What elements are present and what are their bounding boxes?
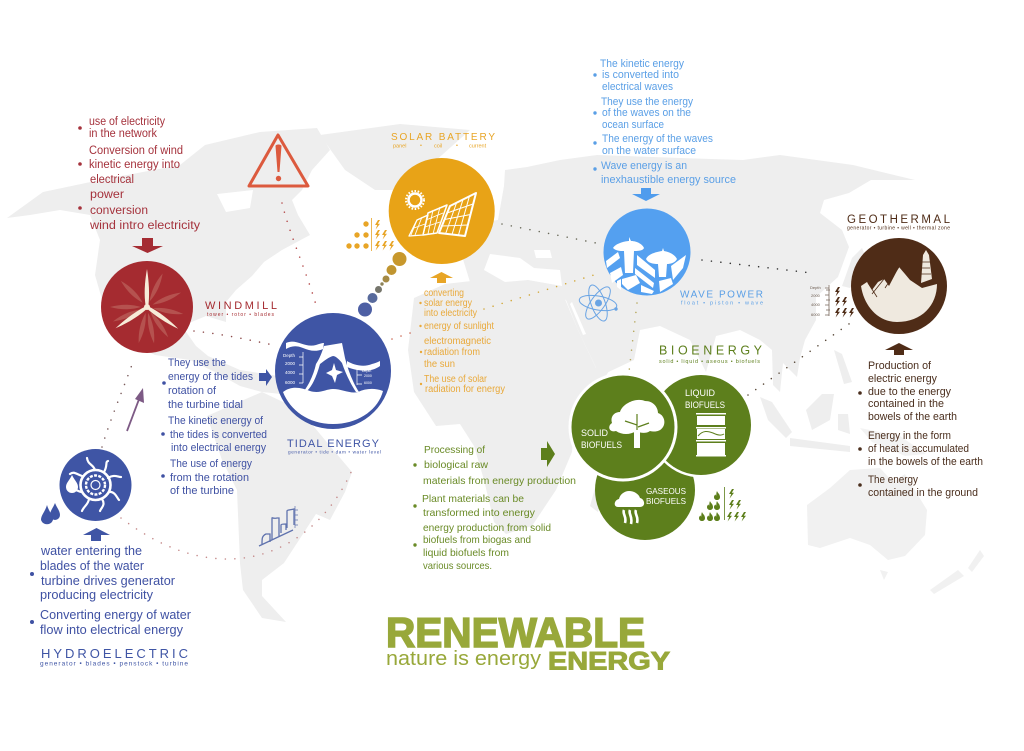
heading: bioenergy: BIOENERGY [659, 344, 763, 358]
text: wave bullets [593, 58, 736, 186]
text: wave bullets: electrical waves [602, 81, 673, 93]
text: tidal bullets: from the rotation [170, 472, 249, 484]
text: hydro bullets: producing electricity [40, 588, 154, 602]
icon: gaseous biofuels circle [595, 440, 695, 540]
map: Iberia and Britain [446, 226, 470, 258]
text: bio bullets [413, 444, 576, 572]
icon: tidal circle: 2000 [364, 374, 372, 378]
text: solar bullets: The use of solar [424, 374, 488, 385]
text: windmill bullets: use of electricity [89, 116, 165, 128]
text: geothermal bullets: due to the energy [868, 386, 951, 398]
text: wave bullets: The kinetic energy [600, 58, 684, 70]
text: solar bullets [419, 288, 505, 395]
text: windmill bullets: in the network [89, 128, 157, 140]
heading: wave power: WAVE POWER [680, 290, 763, 300]
heading: hydroelectric: HYDROELECTRIC [41, 646, 188, 661]
map: Tasmania and New Zealand [880, 550, 984, 594]
icon: windmill circle [101, 261, 193, 353]
text: bio bullets: Plant materials can be [422, 493, 524, 505]
map: New Guinea [860, 428, 926, 456]
heading: hydroelectric: generator • blades • penstock • turbine [40, 660, 188, 668]
dotted connector: solar to wave [502, 224, 596, 243]
text: solar bullets: into electricity [424, 308, 477, 319]
panel: windmill [78, 116, 277, 353]
arrow: tidal right [259, 369, 272, 386]
map: Eurasia [462, 155, 915, 392]
icon: water drops [41, 503, 60, 524]
heading: solar battery: • [420, 143, 422, 149]
heading: windmill: WINDMILL [205, 300, 277, 312]
text: tidal bullets: the tides is converted [170, 429, 267, 441]
text: windmill bullets [78, 116, 200, 232]
title: renewable energy: RENEWABLE [386, 609, 645, 656]
text: geothermal bullets: electric energy [868, 373, 937, 385]
panel: bioenergy [413, 344, 763, 572]
dotted connector: bioenergy to geothermal [748, 319, 856, 395]
text: wave bullets: Wave energy is an [601, 160, 687, 172]
dotted connector: solar text to wave [484, 274, 597, 309]
text: hydro bullets: blades of the water [40, 559, 144, 573]
dotted connector: tidal to solar text [392, 332, 413, 339]
icon: tidal circle [275, 313, 391, 429]
icon: tidal circle: 6000 [364, 381, 372, 385]
text: tidal bullets: They use the [168, 357, 226, 369]
dotted connector: hydro to windmill [102, 362, 133, 447]
text: tidal bullets: rotation of [168, 385, 217, 397]
heading: solar battery: panel [393, 144, 406, 150]
heading: windmill: tower • rotor • blades [207, 312, 274, 318]
text: windmill bullets: Conversion of wind [89, 145, 183, 157]
map: Sumatra [760, 397, 792, 438]
text: bio bullets: materials from energy production [423, 475, 576, 487]
icon: bar chart [259, 506, 298, 546]
arrow: geothermal up [885, 343, 913, 355]
text: bio bullets: biofuels from biogas and [423, 534, 531, 546]
arrow: wave down [632, 188, 660, 201]
dotted connector: windmill to tidal [194, 331, 278, 346]
heading: geothermal: GEOTHERMAL [847, 214, 951, 226]
heading: tidal energy: generator • tide • dam • water level [288, 450, 381, 454]
icon: solar circle [389, 158, 495, 264]
text: bio bullets: energy production from solid [423, 522, 551, 534]
heading: tidal energy: TIDAL ENERGY [287, 438, 380, 450]
icon: depth gauge with bolts: 6000 [811, 312, 821, 317]
text: bio bullets: Processing of [424, 444, 485, 456]
map: Greenland [320, 124, 470, 190]
dotted connector: wave to bioenergy [629, 303, 637, 372]
heading: bioenergy: solid • liquid • aseous • biofuels [659, 359, 760, 365]
icon: solid biofuels circle [568, 372, 678, 482]
heading: wave power [680, 290, 763, 306]
icon: depth gauge with bolts: 4000 [811, 302, 821, 307]
text: wave bullets: of the waves on the [602, 107, 691, 119]
text: hydro bullets: flow into electrical energy [40, 623, 184, 637]
title: renewable energy [386, 609, 670, 676]
heading: hydroelectric [40, 646, 188, 668]
text: solar bullets: the sun [424, 359, 455, 370]
text: windmill bullets: power [90, 189, 124, 201]
text: bio bullets: biological raw [424, 459, 488, 471]
text: tidal bullets: The kinetic energy of [168, 415, 264, 427]
text: wave bullets: The energy of the waves [602, 133, 713, 145]
text: geothermal bullets: The energy [868, 474, 918, 486]
text: bio bullets: liquid biofuels from [423, 547, 509, 559]
text: wave bullets: ocean surface [602, 119, 664, 131]
text: tidal bullets: of the turbine [170, 485, 234, 497]
icon: depth gauge with bolts [810, 285, 854, 318]
text: geothermal bullets: contained in the [868, 398, 944, 410]
text: wave bullets: is converted into [602, 69, 679, 81]
dotted connector: warning to tidal [282, 203, 316, 305]
text: windmill bullets: kinetic energy into [89, 159, 180, 171]
text: geothermal bullets: of heat is accumulated [868, 443, 969, 455]
text: windmill bullets: conversion [90, 205, 148, 217]
icon: tidal circle: 4000 [285, 370, 296, 375]
icon: tidal circle: Depth [283, 353, 296, 358]
text: bio bullets: various sources. [423, 560, 492, 572]
heading: geothermal: generator • turbine • well • thermal zone [847, 226, 950, 232]
text: geothermal bullets: bowels of the earth [868, 411, 957, 423]
text: hydro bullets [30, 544, 191, 637]
arrow: solar up [430, 272, 453, 283]
text: tidal bullets [161, 357, 267, 497]
text: hydro bullets: water entering the [40, 544, 142, 558]
map: Africa [408, 280, 612, 534]
text: solar bullets: solar energy [424, 298, 472, 309]
text: wave bullets: They use the energy [601, 96, 693, 108]
text: wave bullets: on the water surface [602, 145, 696, 157]
icon: tidal circle: Depth [362, 369, 371, 373]
panel: geothermal [810, 214, 983, 499]
heading: solar battery: • [456, 143, 458, 149]
map: Australia [807, 468, 927, 560]
text: windmill bullets: wind intro electricity [89, 220, 200, 232]
map: South America [207, 392, 352, 622]
text: wave bullets: inexhaustible energy source [601, 174, 736, 186]
icon: gaseous biofuels circle: BIOFUELS [646, 496, 686, 506]
map: inland seas cut-outs [217, 190, 586, 335]
panel: hydroelectric [30, 449, 191, 668]
text: bio bullets: transformed into energy [423, 507, 536, 519]
text: solar bullets: radiation for energy [425, 384, 505, 395]
icon: bio legend flames and bolts [699, 487, 746, 522]
text: tidal bullets: into electrical energy [171, 442, 266, 454]
icon: solid biofuels circle: SOLID [581, 428, 608, 439]
text: solar bullets: radiation from [424, 347, 480, 358]
icon: gaseous biofuels circle: GASEOUS [646, 486, 686, 496]
panel: tidal energy [161, 313, 391, 497]
arrow: bio right [541, 441, 555, 467]
icon: liquid biofuels circle: BIOFUELS [685, 400, 725, 411]
arrow: hydro up [83, 528, 110, 541]
text: geothermal bullets: in the bowels of the earth [868, 456, 983, 468]
title: renewable energy: ENERGY [548, 648, 670, 676]
heading: solar battery: coil [434, 144, 442, 150]
icon: depth gauge with bolts: 2000 [811, 293, 821, 298]
text: tidal bullets: energy of the tides [168, 371, 253, 383]
text: tidal bullets: The use of energy [170, 458, 252, 470]
icon: wave circle [604, 208, 690, 296]
text: geothermal bullets: contained in the ground [868, 487, 978, 499]
text: solar bullets: converting [424, 288, 464, 299]
text: solar bullets: electromagnetic [424, 336, 491, 347]
world map background [7, 124, 984, 622]
icon: connecting bubbles [358, 252, 406, 316]
dotted connector: hydro to tidal arc [121, 470, 352, 559]
text: solar bullets: energy of sunlight [424, 321, 494, 332]
heading: solar battery [391, 132, 495, 150]
text: hydro bullets: Converting energy of water [40, 608, 191, 622]
panel: solar battery [346, 132, 505, 395]
map: Borneo [806, 394, 834, 430]
icon: depth gauge with bolts: Depth [810, 285, 821, 290]
heading: solar battery: current [469, 144, 487, 150]
icon: liquid biofuels circle: LIQUID [685, 388, 715, 399]
panel: wave power [578, 58, 763, 323]
text: geothermal bullets: Production of [868, 360, 932, 372]
icon: hydro wheel circle [60, 449, 132, 521]
map: North America [7, 128, 330, 396]
arrow: windmill down [132, 238, 163, 253]
title: renewable energy: nature is energy [386, 648, 541, 670]
heading: wave power: float • piston • wave [681, 300, 763, 306]
heading: windmill [205, 300, 277, 318]
text: hydro bullets: turbine drives generator [41, 574, 175, 588]
icon: warning triangle [249, 135, 308, 186]
text: windmill bullets: electrical [90, 174, 134, 186]
map: Japan [842, 248, 868, 288]
icon: solid biofuels circle: BIOFUELS [581, 440, 622, 451]
text: geothermal bullets: Energy in the form [868, 430, 951, 442]
map: Sulawesi and Philippines [834, 350, 852, 434]
icon: solar legend dots and bolts [346, 218, 394, 251]
icon: tidal circle: 6000 [285, 380, 296, 385]
text: geothermal bullets [858, 360, 983, 499]
icon: tidal circle: 2000 [285, 361, 296, 366]
map: Java [790, 438, 850, 452]
heading: geothermal [847, 214, 951, 232]
icon: geothermal circle [851, 238, 947, 334]
dotted connector: wave to geothermal [702, 260, 812, 273]
heading: bioenergy [659, 344, 763, 365]
heading: solar battery: SOLAR BATTERY [391, 132, 495, 143]
arrow: purple diagonal [127, 388, 144, 431]
icon: liquid biofuels circle [648, 372, 754, 478]
icon: atom [578, 283, 618, 323]
text: tidal bullets: the turbine tidal [168, 399, 243, 411]
